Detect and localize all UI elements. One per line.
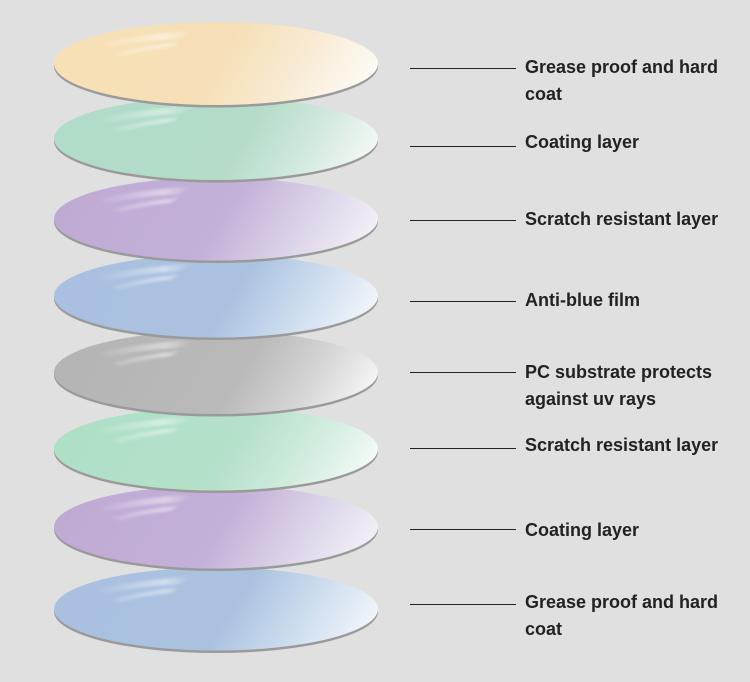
lens 8: blue	[54, 568, 378, 653]
lens 6: green	[54, 408, 378, 493]
lens 2: green	[54, 97, 378, 182]
label 5	[410, 362, 712, 409]
label 1: Grease proof and hard	[525, 57, 718, 77]
label 3: Scratch resistant layer	[525, 209, 718, 229]
lens stack	[54, 22, 378, 653]
label 1: coat	[525, 84, 562, 104]
label 5: against uv rays	[525, 389, 656, 409]
label 2: Coating layer	[525, 132, 639, 152]
label 8: Grease proof and hard	[525, 592, 718, 612]
lens 4: blue	[54, 254, 378, 340]
label 7: Coating layer	[525, 520, 639, 540]
label 4: Anti-blue film	[525, 290, 640, 310]
label 6: Scratch resistant layer	[525, 435, 718, 455]
label 8	[410, 592, 718, 639]
label 1	[410, 57, 718, 104]
lens 5: grey	[54, 331, 378, 416]
lens 7: purple	[54, 486, 378, 571]
label 5: PC substrate protects	[525, 362, 712, 382]
lens 3: purple	[54, 178, 378, 263]
lens 1: yellow	[54, 22, 378, 108]
label 8: coat	[525, 619, 562, 639]
